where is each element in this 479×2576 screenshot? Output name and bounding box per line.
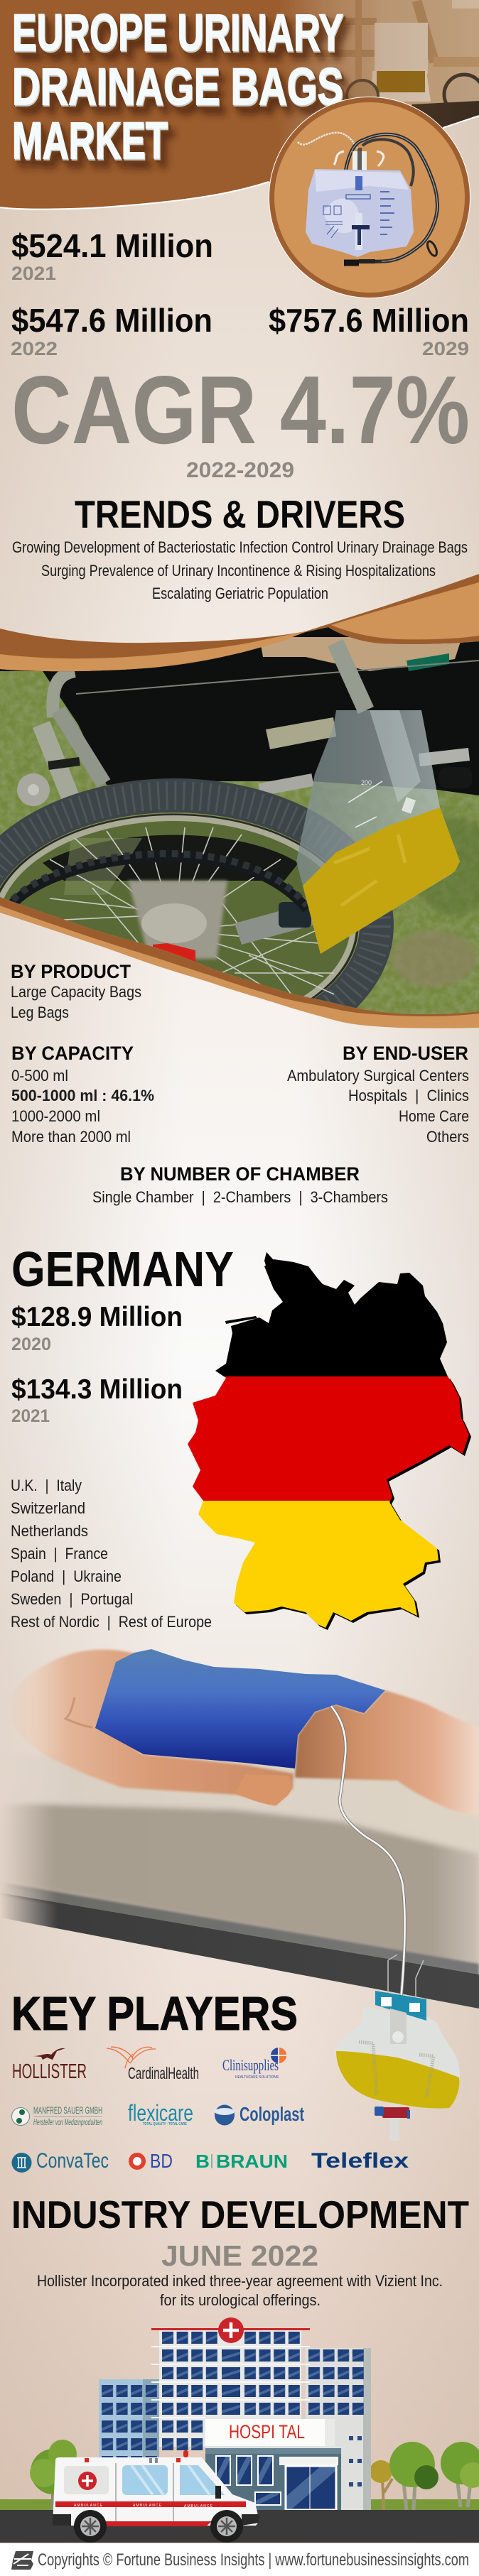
stat: 2021 bbox=[11, 1374, 183, 1426]
header band with hospital photo bbox=[0, 0, 479, 213]
stat: 2021 market size bbox=[11, 227, 213, 284]
segment: by end-user: Others bbox=[426, 1128, 469, 1146]
logo: Cardinal Health: CardinalHealth bbox=[128, 2064, 199, 2082]
logo: BD bbox=[129, 2150, 173, 2172]
right wing bbox=[306, 2348, 371, 2510]
segment: by end-user: Hospitals | Clinics bbox=[348, 1087, 469, 1104]
stat: 2021 market size: 2021 bbox=[11, 263, 56, 284]
stat: 2029 market size: 2029 bbox=[422, 338, 469, 359]
top wave ribbon bbox=[0, 574, 479, 671]
logo: Coloplast bbox=[215, 2103, 304, 2125]
wheelchair photo bbox=[0, 627, 479, 1014]
ambulance lettering: AMBULANCE bbox=[184, 2504, 213, 2509]
logo: Hollister bbox=[12, 2048, 87, 2083]
frame tubes bbox=[53, 671, 75, 717]
segment: by end-user: Home Care bbox=[399, 1107, 469, 1125]
stat: 2020: $128.9 Million bbox=[11, 1302, 183, 1332]
seat bbox=[0, 625, 479, 795]
segment: by capacity: 0-500 ml bbox=[11, 1067, 68, 1085]
trees bbox=[30, 2440, 479, 2510]
logo: Flexicare: TOTAL QUALITY - TOTAL CARE bbox=[143, 2122, 187, 2126]
logo: BD: BD bbox=[150, 2150, 173, 2172]
ambulance lettering bbox=[74, 2504, 213, 2509]
logo: B. Braun: B bbox=[195, 2151, 210, 2172]
stat: 2022 market size: 2022 bbox=[11, 338, 58, 359]
segment: by product bbox=[11, 961, 141, 1021]
industry development bbox=[11, 2192, 469, 2309]
roof cross badge bbox=[218, 2317, 244, 2343]
segment: by capacity: More than 2000 ml bbox=[11, 1128, 131, 1146]
segment: by number of chamber: BY NUMBER OF CHAMBER bbox=[120, 1163, 360, 1185]
logo: Clinisupplies: Clinisupplies bbox=[222, 2056, 279, 2074]
logo: Manfred Sauer: MANFRED SAUER GMBH bbox=[33, 2105, 102, 2116]
hanging urine bag: 200 bbox=[361, 779, 372, 786]
stat: 2029 market size: $757.6 Million bbox=[269, 302, 469, 339]
logo: Teleflex: Teleflex bbox=[311, 2149, 409, 2173]
hanging bag in photo bbox=[371, 23, 431, 102]
segment: by end-user bbox=[287, 1043, 469, 1146]
stat: 2029 market size bbox=[269, 302, 469, 359]
lower wave ribbon bbox=[0, 897, 479, 1028]
wheel bbox=[0, 795, 377, 1055]
left wing bbox=[99, 2379, 159, 2504]
other countries list: Switzerland bbox=[11, 1499, 85, 1517]
ambulance lettering: AMBULANCE bbox=[74, 2504, 103, 2508]
bed bbox=[0, 1754, 479, 2009]
title: EUROPE URINARY bbox=[12, 4, 343, 62]
logo: Flexicare: flexicare bbox=[128, 2100, 193, 2126]
footer bbox=[0, 2543, 479, 2576]
stat: 2020 bbox=[11, 1302, 183, 1354]
segment: by product: Leg Bags bbox=[11, 1004, 69, 1021]
driver list: Escalating Geriatric Population bbox=[152, 585, 328, 602]
title bbox=[12, 4, 343, 170]
stat: 2021 market size: $524.1 Million bbox=[11, 227, 213, 264]
segment: by capacity bbox=[11, 1043, 154, 1146]
other countries list: Netherlands bbox=[11, 1522, 88, 1540]
other countries list: Rest of Nordic | Rest of Europe bbox=[11, 1613, 212, 1631]
logo: Coloplast: Coloplast bbox=[239, 2103, 304, 2125]
ground strip bbox=[0, 2499, 479, 2510]
stat: 2020: 2020 bbox=[11, 1335, 51, 1354]
other countries list: Sweden | Portugal bbox=[11, 1590, 133, 1608]
map: Germany flag bbox=[178, 1243, 479, 1636]
patient body bbox=[7, 1649, 479, 1816]
logo: ConvaTec: ConvaTec bbox=[36, 2149, 109, 2173]
date: June 2022: JUNE 2022 bbox=[161, 2239, 318, 2272]
development text bbox=[37, 2272, 443, 2309]
product circle bbox=[269, 97, 470, 298]
CAGR figure: 2022-2029 bbox=[186, 457, 294, 482]
urine collection bag bbox=[336, 1991, 460, 2141]
segment: by end-user: BY END-USER bbox=[343, 1043, 468, 1064]
other countries list bbox=[11, 1477, 212, 1631]
logo: Clinisupplies: HEALTHCARE SOLUTIONS bbox=[235, 2075, 279, 2080]
segment: by product: BY PRODUCT bbox=[11, 961, 131, 982]
heading: Germany: GERMANY bbox=[11, 1241, 234, 1297]
cross badge bbox=[78, 2472, 97, 2490]
main tower bbox=[151, 2317, 310, 2450]
title: MARKET bbox=[12, 112, 168, 170]
logo: B. Braun: BRAUN bbox=[216, 2151, 288, 2172]
segment: by number of chamber bbox=[92, 1163, 388, 1206]
segment: by capacity: 500-1000 ml : 46.1% bbox=[11, 1087, 154, 1104]
hanging urine bag bbox=[296, 710, 460, 954]
logo: Manfred Sauer bbox=[11, 2105, 102, 2127]
other countries list: U.K. | Italy bbox=[11, 1477, 82, 1494]
driver list bbox=[12, 538, 468, 602]
ambulance lettering: AMBULANCE bbox=[133, 2504, 162, 2508]
Germany stats bbox=[11, 1241, 234, 1426]
stat: 2022 market size: $547.6 Million bbox=[11, 302, 212, 339]
key players bbox=[11, 1987, 409, 2173]
catheter tube bbox=[331, 1706, 405, 2001]
segment: by product: Large Capacity Bags bbox=[11, 983, 141, 1001]
hospital sign: HOSPI TAL bbox=[229, 2421, 305, 2442]
wheels bbox=[74, 2510, 243, 2543]
logo: Manfred Sauer: Hersteller von Medizinprodukten bbox=[33, 2117, 102, 2127]
hospital sign bbox=[205, 2419, 335, 2446]
logo: ConvaTec bbox=[11, 2149, 109, 2173]
segment: by capacity: 1000-2000 ml bbox=[11, 1107, 100, 1125]
title: DRAINAGE BAGS bbox=[12, 58, 343, 116]
segment: by capacity: BY CAPACITY bbox=[11, 1043, 134, 1064]
logo: Hollister: HOLLISTER bbox=[12, 2060, 87, 2083]
road bbox=[0, 2510, 479, 2543]
heading: key players: KEY PLAYERS bbox=[11, 1987, 298, 2040]
illustration: patient in bed with drainage bag bbox=[0, 1649, 479, 2141]
segment: by number of chamber: Single Chamber | 2-Chambers | 3-Chambers bbox=[92, 1188, 388, 1206]
stat: 2021: 2021 bbox=[11, 1406, 50, 1426]
stat: 2022 market size bbox=[11, 302, 212, 359]
stat: 2021: $134.3 Million bbox=[11, 1374, 183, 1405]
other countries list: Poland | Ukraine bbox=[11, 1567, 122, 1585]
other countries list: Spain | France bbox=[11, 1545, 108, 1563]
heading: trends and drivers: TRENDS & DRIVERS bbox=[75, 492, 405, 536]
hospital lobby bbox=[205, 2446, 345, 2510]
straps bbox=[388, 1955, 424, 2001]
logo: Cardinal Health bbox=[107, 2047, 199, 2082]
development text: for its urological offerings. bbox=[160, 2291, 321, 2309]
logo: Clinisupplies bbox=[222, 2048, 286, 2080]
ambulance bbox=[53, 2450, 259, 2543]
spokes bbox=[50, 827, 334, 1009]
icon: drainage bag bbox=[298, 133, 438, 263]
trends and drivers bbox=[12, 492, 468, 602]
icon: Fortune Business Insights logo bbox=[11, 2551, 33, 2570]
illustration: ground, trees and hospital bbox=[0, 2317, 479, 2543]
